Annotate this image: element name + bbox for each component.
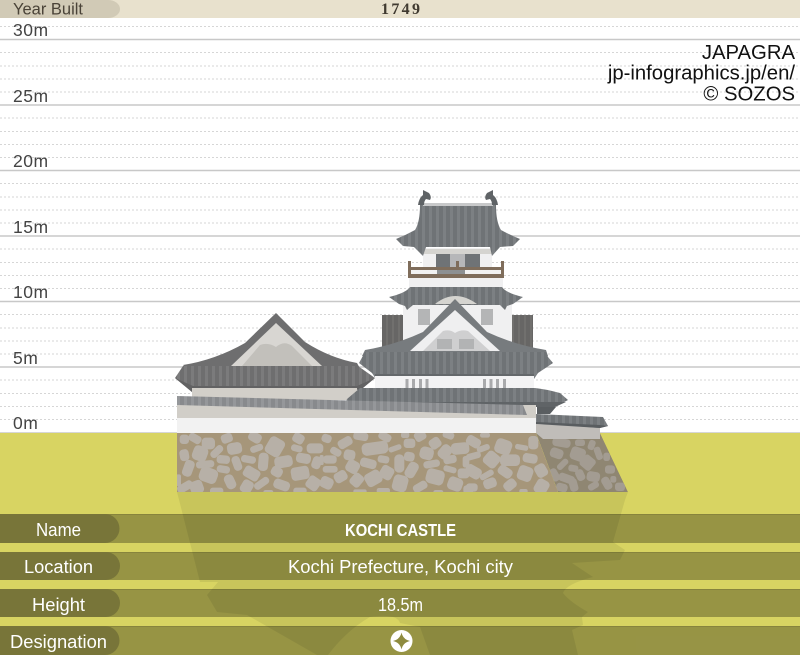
stones east xyxy=(466,433,550,492)
balcony railing xyxy=(408,261,504,278)
annex roof xyxy=(536,414,608,428)
upper tower xyxy=(345,190,568,414)
info row: height xyxy=(0,589,800,617)
top floor wall xyxy=(423,248,492,268)
wall vents xyxy=(406,379,506,388)
height scale labels: 30m xyxy=(13,20,49,40)
credit text: jp-infographics.jp/en/ xyxy=(607,62,795,84)
main roof xyxy=(359,352,553,379)
height scale grid xyxy=(0,26,800,433)
icon: designation star badge xyxy=(390,630,412,652)
second floor wall xyxy=(403,304,512,342)
credit text: JAPAGRA xyxy=(702,42,795,64)
height scale labels: 5m xyxy=(13,348,38,368)
year built bar xyxy=(0,0,800,18)
height scale labels xyxy=(13,20,49,433)
height scale labels: 20m xyxy=(13,151,49,171)
year built label pill xyxy=(0,0,120,18)
name label: Name xyxy=(36,520,81,540)
left turret xyxy=(175,313,375,400)
castle shadow on ground xyxy=(177,492,628,655)
year built label: Year Built xyxy=(13,0,83,18)
stone base right xyxy=(536,433,628,493)
low wall white band xyxy=(177,418,536,433)
designation label pill xyxy=(0,626,119,655)
left turret roof xyxy=(175,366,375,392)
info row: designation xyxy=(0,626,800,655)
annex wall xyxy=(536,424,600,439)
height scale labels: 10m xyxy=(13,282,49,302)
main gable xyxy=(362,299,548,356)
credit text xyxy=(607,42,795,106)
right annex xyxy=(536,414,608,439)
name label pill xyxy=(0,514,119,543)
height label pill xyxy=(0,589,120,617)
ground xyxy=(0,433,800,655)
location value: Kochi Prefecture, Kochi city xyxy=(288,557,513,577)
top floor base wall xyxy=(409,276,503,288)
stones west xyxy=(177,433,324,492)
height label: Height xyxy=(32,595,85,615)
location label: Location xyxy=(24,557,93,577)
second floor windows xyxy=(418,309,430,325)
side annex blocks xyxy=(382,315,403,349)
height scale labels: 0m xyxy=(13,413,38,433)
height scale labels: 25m xyxy=(13,86,49,106)
castle xyxy=(0,190,800,655)
info row: name xyxy=(0,514,800,543)
stones centre xyxy=(320,433,473,492)
low wall roof xyxy=(177,396,527,415)
middle roof crest xyxy=(435,296,477,304)
credit text: © SOZOS xyxy=(703,84,795,106)
left turret wall xyxy=(192,388,357,400)
year built value: 1749 xyxy=(381,1,420,18)
stone base main xyxy=(177,433,558,492)
lower roof xyxy=(345,388,568,407)
top floor windows xyxy=(436,254,450,268)
location label pill xyxy=(0,552,120,580)
low wall xyxy=(177,396,536,433)
name value: KOCHI CASTLE xyxy=(345,520,456,540)
low wall beige face xyxy=(177,405,536,419)
info row: location xyxy=(0,552,800,580)
roof ornaments xyxy=(418,190,431,205)
main floor wall xyxy=(375,376,534,389)
height scale labels: 15m xyxy=(13,217,49,237)
gable windows xyxy=(437,339,452,349)
height value: 18.5m xyxy=(378,595,423,615)
left turret gable xyxy=(183,313,362,372)
designation label: Designation xyxy=(10,632,107,652)
middle roof xyxy=(389,287,523,310)
top roof xyxy=(396,205,520,256)
